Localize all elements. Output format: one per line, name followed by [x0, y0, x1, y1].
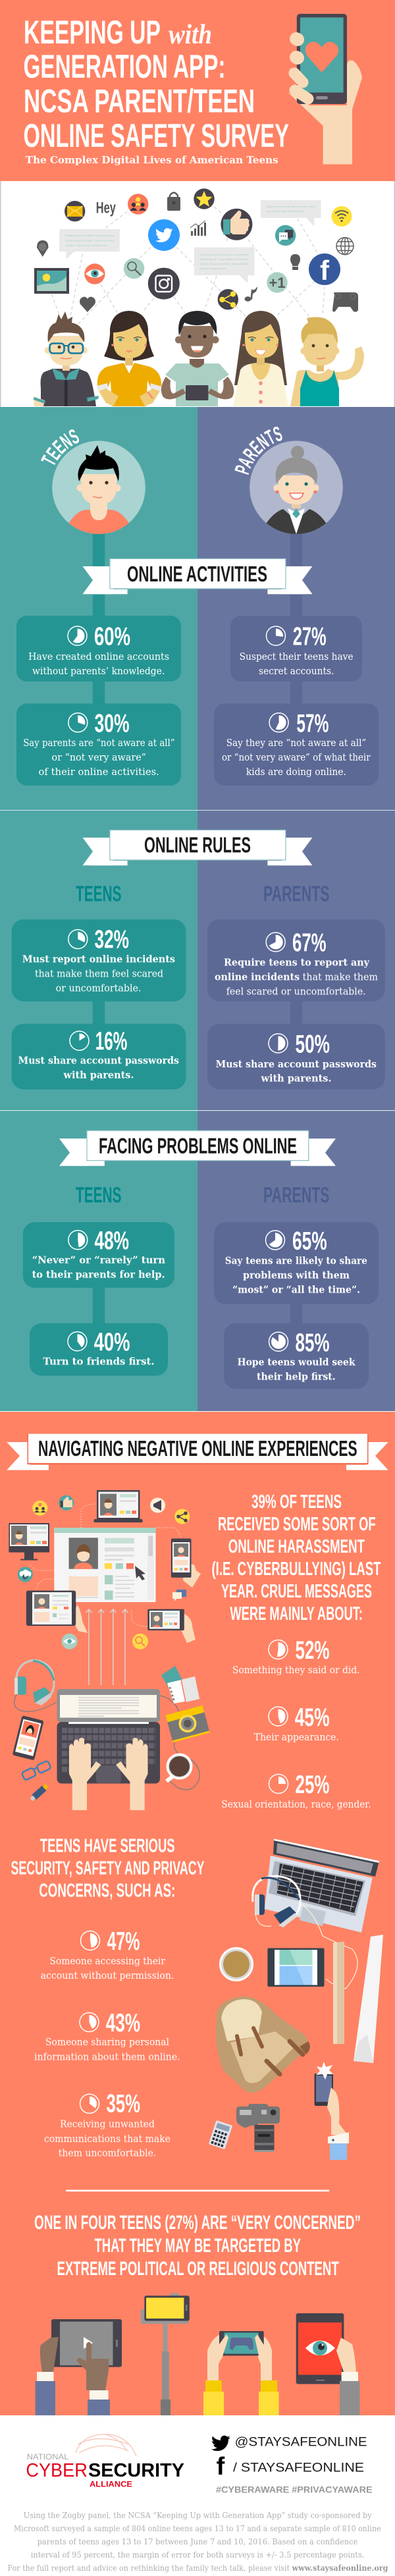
icons around devices	[18, 1495, 190, 1650]
banner: online rules: ONLINE RULES	[144, 833, 251, 857]
stat: 47%: Someone accessing their	[49, 1956, 165, 1967]
arrows	[86, 1609, 128, 1685]
description: feel scared or uncomfortable.	[226, 986, 366, 997]
text: one in four teens	[34, 2212, 361, 2280]
icon: pie 27%	[266, 626, 286, 645]
icon: facebook	[309, 254, 340, 286]
icon: heart	[80, 297, 95, 312]
icon: pie 65%	[266, 1231, 284, 1250]
tablet with hand	[26, 1591, 88, 1633]
speech bubble: top right	[261, 200, 321, 227]
description: kids are doing online.	[246, 767, 346, 778]
description: with parents.	[63, 1069, 134, 1081]
logo: national cyber security alliance: CYBER	[26, 2460, 88, 2481]
description	[22, 953, 175, 994]
social: twitter: @STAYSAFEONLINE	[235, 2434, 367, 2449]
description	[215, 957, 378, 997]
description: secret accounts.	[259, 666, 334, 677]
stat: 32%	[95, 926, 129, 954]
illustration: desk items	[209, 1838, 383, 2160]
description: Suspect their teens have	[240, 652, 354, 662]
stat: 60%	[94, 622, 130, 651]
headphones	[14, 1660, 54, 1705]
description: Have created online accounts	[28, 652, 169, 662]
description	[240, 652, 354, 677]
stat: 35%	[44, 2090, 171, 2159]
description: Turn to friends first.	[43, 1356, 155, 1368]
stat: 47%	[41, 1927, 174, 1981]
ruler	[333, 1942, 344, 2044]
icon: pie 67%	[266, 932, 285, 952]
description: Must report online incidents	[22, 953, 175, 965]
methodology note: interval of 95 percent, the margin of error for both surveys is +/- 3.5 percentage points.	[31, 2550, 364, 2560]
speech bubble: center: sapien. Mauris pharetra, tellus efficitur	[200, 262, 249, 265]
heading: teens: TEENS	[76, 1183, 121, 1207]
coffee cup	[219, 1947, 253, 1981]
description	[32, 1255, 165, 1281]
icon: share	[218, 289, 238, 309]
person: teen girl in cream	[233, 311, 288, 406]
icon: star	[194, 188, 215, 209]
card: teens 16%	[12, 1024, 186, 1089]
camera	[165, 1705, 210, 1742]
laptop	[93, 1490, 143, 1522]
description: “Never” or “rarely” turn	[32, 1255, 165, 1266]
icon: pie 30%	[68, 713, 88, 732]
notebook	[161, 1666, 199, 1704]
illustration: connected devices	[9, 1490, 201, 1685]
banner: online activities	[83, 558, 312, 594]
panel: header	[0, 0, 395, 181]
stat: 85%	[295, 1329, 329, 1357]
usb stick	[29, 1783, 49, 1802]
stat: 67%	[292, 928, 327, 957]
backpack	[216, 1997, 310, 2093]
speech bubble: left: Pellentesque molestie odio vehicula	[65, 234, 115, 237]
description: or “not very aware”	[51, 753, 146, 763]
icon: map pin	[37, 240, 49, 257]
banner: online rules	[83, 830, 312, 865]
description: to their parents for help.	[32, 1270, 165, 1281]
text: concerns heading: CONCERNS, SUCH AS:	[39, 1881, 175, 1902]
icon: lock	[167, 192, 180, 211]
icon: light bulb	[290, 254, 300, 270]
card: parents 50%	[207, 1024, 385, 1089]
heading: parents: PARENTS	[263, 1183, 329, 1207]
card: teens 30%	[16, 703, 181, 786]
card: parents 85%	[224, 1324, 369, 1389]
icon: chat	[275, 225, 296, 246]
description	[222, 738, 371, 778]
stat: 52%	[232, 1636, 359, 1676]
title	[24, 14, 289, 154]
game device	[203, 2331, 279, 2415]
dslr camera	[236, 2104, 280, 2152]
icon: group	[128, 194, 148, 215]
stat: 45%	[254, 1704, 339, 1743]
label: hey: Hey	[96, 199, 116, 217]
icon: envelope	[65, 201, 85, 221]
stat: 43%: 43%	[106, 2009, 140, 2037]
description: Require teens to report any	[224, 957, 370, 969]
icon: music note	[245, 286, 257, 302]
selfie stick	[141, 2293, 190, 2415]
card: teens 32%	[12, 919, 186, 1002]
stat: 35%: Receiving unwanted	[60, 2119, 155, 2130]
speech bubble: center: adipiscing elit. Suspendisse id tincidunt	[200, 257, 249, 261]
hashtags: #CYBERAWARE #PRIVACYAWARE	[216, 2485, 373, 2495]
glasses	[21, 1760, 51, 1781]
description: Must share account passwords	[216, 1059, 377, 1070]
icon: picture	[34, 268, 69, 294]
description: with parents.	[261, 1073, 332, 1084]
icon: pie 50%	[269, 1034, 288, 1053]
description: Must share account passwords	[18, 1056, 179, 1067]
teen avatar	[52, 441, 145, 534]
stat: 27%	[293, 622, 327, 651]
speech bubble: top right: Maecenas sit amet placerat enim. Sed	[267, 205, 315, 208]
text: concerns heading: SECURITY, SAFETY AND PRIVACY	[11, 1858, 204, 1879]
stat: 47%: account without permission.	[41, 1971, 174, 1981]
stat: 25%: Sexual orientation, race, gender.	[221, 1800, 371, 1810]
stat: 25%	[221, 1771, 371, 1810]
landscape phone with hand	[147, 1609, 196, 1643]
description: online incidents that make them	[215, 971, 378, 982]
icon: pie 60%	[68, 626, 87, 645]
methodology note: For the full report and advice on rethinking the family tech talk, please visit www.staysafeonline.org	[8, 2563, 388, 2573]
person: teen with glasses	[34, 311, 99, 406]
stat: 16%	[95, 1027, 127, 1056]
speech bubble: top right: non mi quis dolor finibus varius.	[267, 209, 305, 213]
icon: pie 32%	[68, 930, 88, 949]
label: parents arc: PARENTS	[234, 427, 282, 475]
banner: facing problems online: FACING PROBLEMS ONLINE	[99, 1134, 297, 1158]
speech bubble: center	[194, 248, 254, 283]
paper roll	[354, 1935, 383, 2063]
hands on keyboard	[69, 1738, 147, 1810]
card: parents 57%	[214, 703, 379, 786]
description: Hope teens would seek	[237, 1356, 356, 1368]
description	[18, 1056, 179, 1081]
text: harassment heading: 39% OF TEENS	[251, 1491, 342, 1513]
card: teens 60%	[16, 616, 181, 682]
phone with hand	[171, 1538, 201, 1588]
title: NCSA PARENT/TEEN	[24, 83, 255, 120]
icon: instagram	[148, 268, 180, 300]
description: of their online activities.	[38, 767, 159, 778]
stat: 48%	[95, 1227, 129, 1255]
flash phone	[315, 2062, 349, 2160]
stat: 45%: Their appearance.	[254, 1732, 339, 1743]
stat: 43%: Someone sharing personal	[45, 2037, 169, 2048]
panel: navigating negative online experiences	[0, 1411, 395, 2415]
tablet	[267, 1948, 324, 1987]
panel: teens illustration	[0, 181, 395, 407]
white headphones	[253, 1876, 357, 1989]
text: concerns heading	[11, 1836, 204, 1902]
laptop	[57, 1689, 160, 1783]
logo: national cyber security alliance: SECURITY	[88, 2460, 184, 2481]
browser window	[54, 1528, 155, 1602]
description	[225, 1256, 367, 1296]
stat: 45%: 45%	[295, 1704, 330, 1732]
phone left	[13, 1715, 44, 1760]
icon: twitter	[148, 219, 180, 251]
title: with	[169, 20, 212, 50]
text: harassment heading	[212, 1491, 381, 1624]
parent avatar	[250, 441, 343, 534]
description	[216, 1059, 377, 1084]
methodology note: parents of teens ages 13 to 17 between June 7 and 10, 2016. Based on a confidence	[38, 2536, 357, 2546]
description: problems with them	[243, 1270, 350, 1281]
icon: globe	[336, 238, 354, 255]
icon: pie 16%	[70, 1031, 89, 1050]
icon: bar chart	[190, 221, 206, 236]
panel: teens column background	[0, 407, 198, 1412]
silver laptop	[265, 1838, 379, 1933]
icon: thumbs up	[221, 209, 252, 240]
stat: 25%: 25%	[295, 1771, 329, 1799]
social: facebook	[217, 2453, 364, 2481]
speech bubble: left: scelerisque semper. Nulla vel urna	[65, 238, 115, 242]
label: teens arc: TEENS	[41, 429, 79, 465]
text: concerns heading: TEENS HAVE SERIOUS	[40, 1836, 175, 1857]
video tablet	[36, 2319, 122, 2415]
description	[237, 1356, 356, 1383]
speech bubble: center: Lorem ipsum dolor sit amet, consectetur	[200, 253, 249, 256]
subtitle: The Complex Digital Lives of American Teens	[26, 154, 278, 166]
panel: footer	[8, 2434, 388, 2573]
stat: 50%	[295, 1031, 330, 1059]
icon: facebook: f	[320, 255, 330, 286]
description: without parents’ knowledge.	[32, 666, 165, 677]
card: teens 48%	[23, 1222, 174, 1288]
stat: 40%	[94, 1328, 130, 1356]
illustration: laptop desk	[13, 1660, 210, 1810]
person: teen girl in yellow	[97, 311, 161, 406]
stat: 43%	[34, 2009, 180, 2062]
calculator	[209, 2120, 232, 2149]
icon: eye	[84, 263, 105, 284]
title: GENERATION APP:	[24, 48, 225, 85]
coffee	[166, 1753, 192, 1781]
stat: 57%	[296, 710, 329, 738]
social: facebook: f	[217, 2453, 225, 2481]
icon: hand holding phone	[288, 14, 362, 165]
description: Say they are “not aware at all”	[226, 738, 366, 749]
heading: parents: PARENTS	[263, 881, 329, 906]
icon: gamepad	[332, 292, 358, 312]
monitor	[9, 1523, 49, 1561]
logo: national cyber security alliance	[26, 2434, 184, 2489]
icon: plus one	[267, 272, 288, 293]
speech bubble: center: lacinia tincidunt lorem.	[200, 267, 228, 270]
stat: 47%: 47%	[107, 1927, 140, 1956]
icon: magnifier	[124, 258, 144, 279]
person: teen boy in tank	[290, 317, 364, 406]
description	[28, 652, 169, 677]
logo: national cyber security alliance: ALLIANCE	[90, 2480, 132, 2489]
banner: navigating	[7, 1434, 388, 1470]
card: parents 65%	[214, 1222, 379, 1304]
stat: 35%: 35%	[107, 2090, 140, 2118]
social: facebook: / STAYSAFEONLINE	[233, 2461, 364, 2475]
icon: wifi	[332, 206, 352, 227]
description: “most” or “all the time”.	[232, 1285, 360, 1296]
description: Say parents are “not aware at all”	[23, 738, 175, 749]
speech bubble: left	[59, 229, 120, 259]
description	[23, 738, 175, 778]
description: Say teens are likely to share	[225, 1256, 367, 1267]
stat: 35%: communications that make	[44, 2134, 171, 2145]
stat: 30%	[95, 710, 129, 738]
illustration: hands with devices	[36, 2293, 359, 2415]
red eye tablet	[296, 2313, 359, 2415]
person: teen boy with tablet	[161, 311, 234, 406]
icon: plus one: +1	[269, 275, 286, 291]
stat: 65%	[292, 1227, 327, 1256]
stat: 52%: Something they said or did.	[232, 1665, 359, 1676]
card: parents 27%	[230, 616, 362, 682]
icon: pie 40%	[68, 1331, 87, 1351]
icon: pie 48%	[68, 1230, 88, 1250]
banner: facing problems online	[59, 1131, 336, 1166]
methodology note	[8, 2510, 388, 2573]
description: their help first.	[257, 1372, 336, 1383]
card: parents 67%	[207, 919, 385, 1002]
description: or “not very aware” of what their	[222, 753, 371, 763]
speech bubble: left: sagittis, mattis mi sed iaculis lorem.	[65, 244, 108, 247]
icon: pie 85%	[269, 1332, 288, 1351]
panel: parents column background	[198, 407, 395, 1412]
title: KEEPING UP	[24, 14, 161, 51]
card: teens 40%	[30, 1324, 168, 1376]
description: or uncomfortable.	[56, 984, 142, 994]
description: that make them feel scared	[35, 969, 163, 980]
icon: pie 57%	[269, 713, 288, 732]
heading: teens: TEENS	[76, 881, 121, 906]
stat: 43%: information about them online.	[34, 2052, 180, 2062]
divider	[66, 2190, 329, 2191]
banner: online activities: ONLINE ACTIVITIES	[127, 562, 267, 586]
logo: national cyber security alliance: NATIONAL	[27, 2452, 69, 2461]
stat: 35%: them uncomfortable.	[59, 2148, 156, 2159]
stat: 52%: 52%	[295, 1636, 329, 1665]
connector stems	[93, 530, 302, 1324]
